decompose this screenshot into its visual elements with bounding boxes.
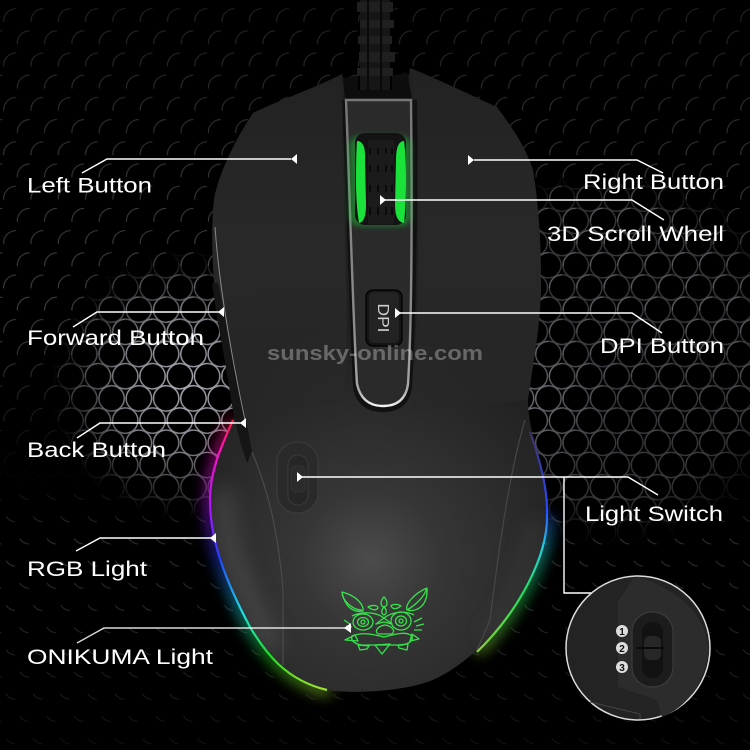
icon: arrowheads — [210, 154, 474, 633]
left button — [212, 74, 347, 420]
label: Light Switch: Light Switch — [585, 502, 723, 526]
position markers: 1 — [619, 627, 625, 638]
position markers: 2 — [619, 644, 625, 655]
icon: braided cable — [357, 0, 395, 92]
mouse illustration — [210, 0, 547, 692]
silver trim — [346, 100, 412, 406]
callout lines and arrows — [73, 159, 664, 643]
leader: Light Switch — [302, 477, 658, 495]
mouse body — [210, 68, 547, 692]
cable slot — [343, 72, 412, 100]
watermark: sunsky-online.com — [267, 343, 483, 365]
label: Right Button: Right Button — [583, 170, 724, 194]
label: Left Button: Left Button — [27, 174, 152, 198]
icon: scroll wheel glow — [349, 136, 411, 226]
label: RGB Light: RGB Light — [27, 557, 147, 581]
side buttons — [212, 283, 252, 463]
switch slot — [632, 612, 673, 687]
leader: RGB Light — [76, 538, 215, 551]
leader: 3D Scroll Whell — [385, 200, 664, 220]
DPI button — [366, 290, 402, 346]
center panel — [342, 100, 417, 412]
right button — [410, 68, 541, 410]
RGB glow — [210, 420, 547, 692]
RGB light strip — [210, 420, 547, 690]
label: ONIKUMA Light: ONIKUMA Light — [27, 645, 213, 669]
icon: ONIKUMA logo — [342, 588, 427, 654]
label: DPI Button: DPI Button — [600, 334, 724, 358]
DPI button: DPI — [374, 304, 391, 332]
leader: Right Button — [474, 160, 663, 173]
scroll wheel — [355, 133, 406, 225]
label: Forward Button: Forward Button — [27, 326, 204, 350]
inset: light switch detail — [566, 576, 710, 720]
light switch — [277, 442, 318, 513]
position markers — [616, 625, 628, 674]
leader: Left Button — [82, 159, 291, 173]
leader: DPI Button — [400, 313, 662, 333]
side edge lines — [215, 227, 245, 420]
leader: Back Button — [77, 423, 244, 438]
leader: ONIKUMA Light — [77, 628, 350, 643]
label: 3D Scroll Whell: 3D Scroll Whell — [547, 222, 724, 246]
inner edge shine — [224, 490, 536, 650]
leader: switch inset — [564, 477, 592, 593]
leader: Forward Button — [73, 312, 222, 327]
label: Back Button: Back Button — [27, 438, 166, 462]
position markers: 3 — [619, 663, 625, 674]
